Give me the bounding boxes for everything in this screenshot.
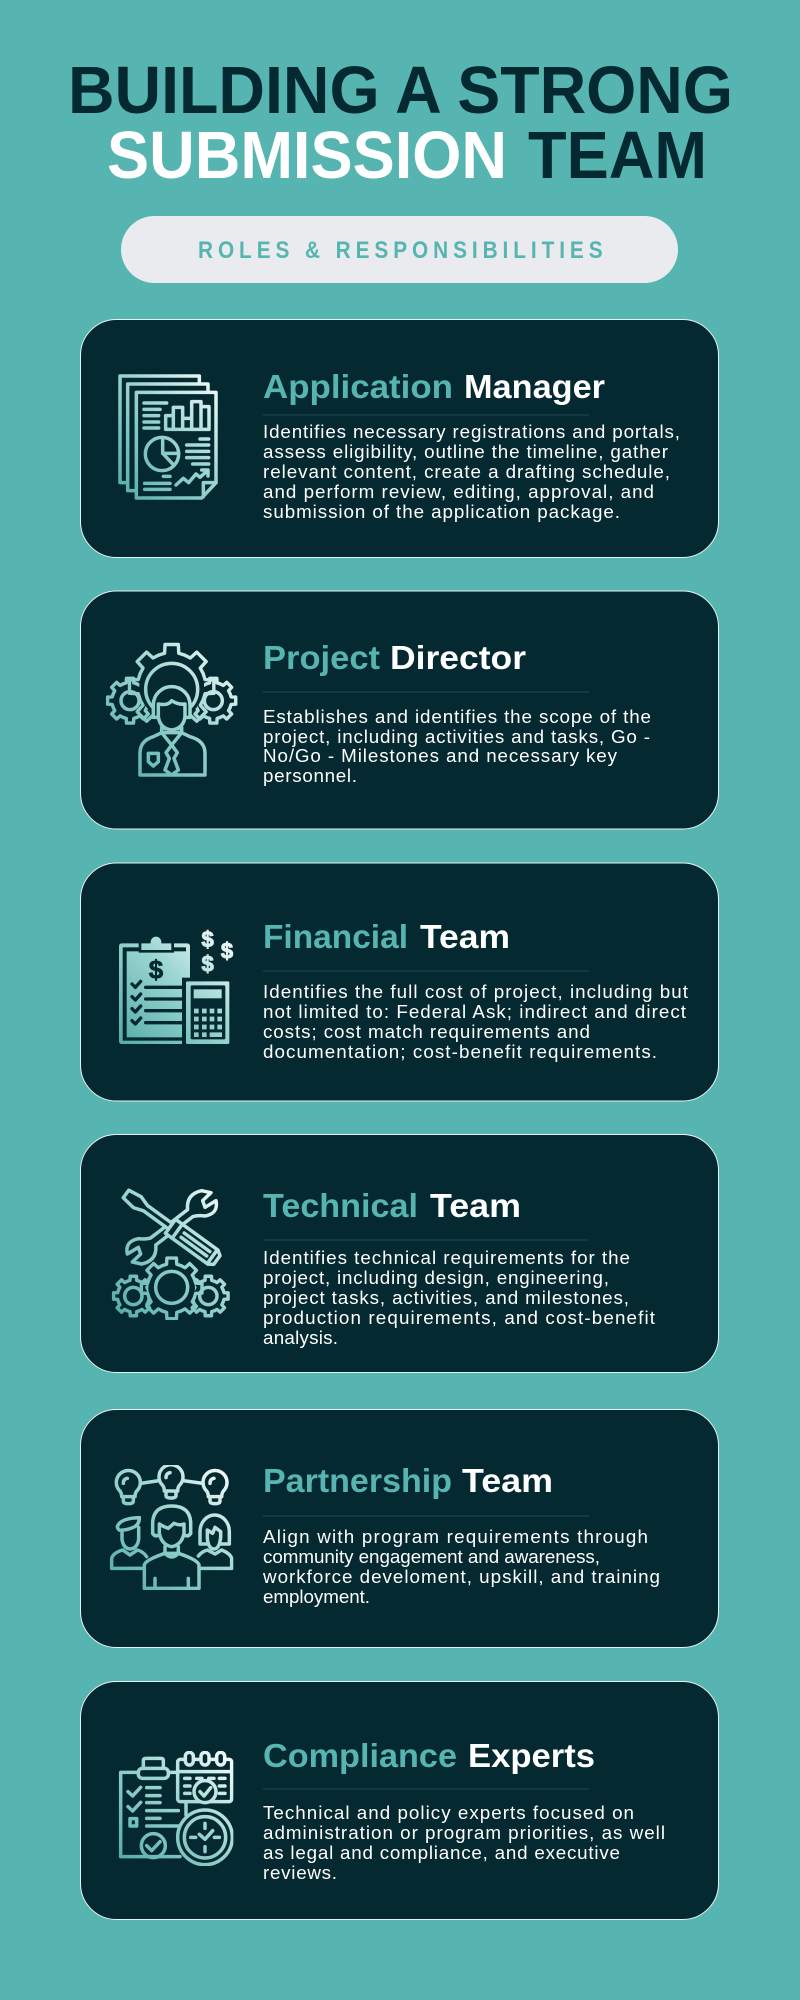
description: Identifies the full cost of project, including but (263, 981, 689, 1002)
heading: Team (430, 1187, 521, 1224)
description (263, 981, 689, 1062)
description: as legal and compliance, and executive (263, 1842, 620, 1863)
heading: Financial (263, 918, 408, 955)
description (262, 1526, 660, 1607)
panel: Project Director (80, 591, 718, 829)
icon: tools and gears (112, 1187, 233, 1320)
title: SUBMISSION (107, 118, 507, 193)
panel: Application Manager (80, 320, 718, 558)
description: assess eligibility, outline the timeline, gather (263, 441, 668, 462)
description: relevant content, create a drafting schedule, (263, 461, 670, 482)
heading: Project (263, 639, 380, 676)
description: Establishes and identifies the scope of the (263, 706, 651, 727)
description: personnel. (263, 765, 357, 786)
description: community engagement and awareness, (263, 1546, 600, 1567)
description: project, including design, engineering, (263, 1267, 609, 1288)
description: project, including activities and tasks, Go - (263, 726, 650, 747)
heading: Team (420, 918, 510, 955)
description: administration or program priorities, as well (263, 1822, 665, 1843)
description (263, 706, 651, 786)
icon: report documents (117, 372, 220, 502)
description: Identifies technical requirements for the (263, 1247, 630, 1268)
icon: clipboard and calculator (117, 928, 233, 1047)
heading (263, 1462, 553, 1499)
description: workforce develoment, upskill, and training (262, 1566, 660, 1587)
description: project tasks, activities, and milestones, (263, 1287, 629, 1308)
description (263, 1247, 656, 1348)
panel: Compliance Experts (80, 1682, 718, 1920)
description: Technical and policy experts focused on (263, 1802, 634, 1823)
heading: Team (462, 1462, 553, 1499)
heading: Compliance (263, 1737, 457, 1774)
subtitle pill (121, 216, 678, 283)
icon: person with gears (105, 642, 238, 778)
heading: Experts (468, 1737, 595, 1774)
description: reviews. (263, 1862, 337, 1883)
heading: Manager (464, 368, 605, 405)
description: production requirements, and cost-benefit (263, 1307, 656, 1328)
description: Align with program requirements through (263, 1526, 648, 1547)
heading (263, 1737, 595, 1774)
heading (263, 1187, 521, 1224)
title (68, 53, 733, 193)
title: TEAM (528, 118, 707, 193)
icon: checklist, calendar and clock (118, 1751, 233, 1866)
description: Identifies necessary registrations and portals, (263, 421, 680, 442)
description: and perform review, editing, approval, and (263, 481, 654, 502)
panel: Financial Team (80, 863, 718, 1101)
description (263, 421, 680, 522)
heading (263, 639, 526, 676)
description: employment. (263, 1586, 370, 1607)
description: submission of the application package. (263, 501, 620, 522)
heading (263, 918, 510, 955)
panel: Technical Team (80, 1134, 718, 1372)
heading: Application (263, 368, 453, 405)
description: analysis. (263, 1327, 338, 1348)
heading: Director (390, 639, 526, 676)
description: costs; cost match requirements and (263, 1021, 590, 1042)
description: No/Go - Milestones and necessary key (263, 745, 618, 766)
description: not limited to: Federal Ask; indirect and direct (263, 1001, 687, 1022)
heading: Technical (263, 1187, 418, 1224)
heading (263, 368, 605, 405)
title: BUILDING A STRONG (68, 53, 733, 128)
description: documentation; cost-benefit requirements. (263, 1041, 657, 1062)
subtitle pill: ROLES & RESPONSIBILITIES (198, 235, 603, 263)
heading: Partnership (263, 1462, 452, 1499)
icon: people with light bulbs (108, 1465, 233, 1590)
panel: Partnership Team (80, 1410, 718, 1648)
description (263, 1802, 665, 1883)
